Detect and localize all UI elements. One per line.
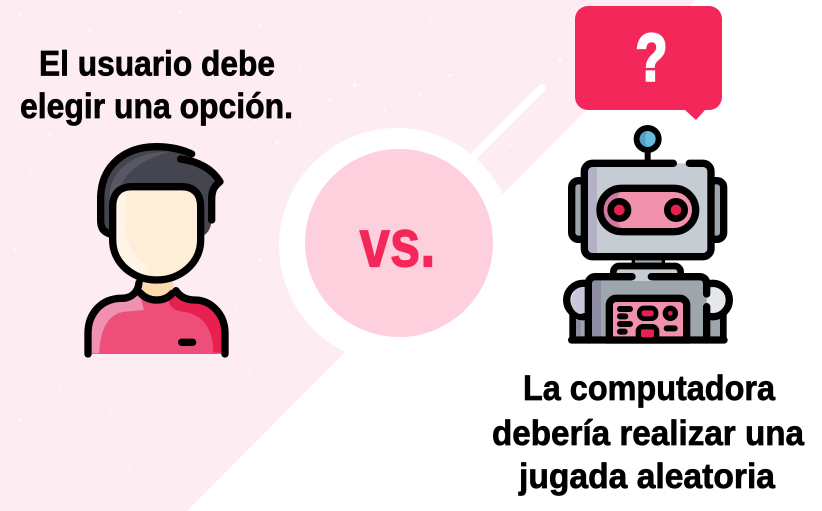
robot neck — [633, 257, 663, 267]
caption: computer: jugada aleatoria — [518, 457, 776, 496]
caption: computer: La computadora — [523, 369, 775, 408]
robot arms — [567, 283, 729, 340]
icon: robot — [567, 128, 729, 340]
heading: user: El usuario debe — [39, 44, 275, 84]
heading: user — [20, 44, 293, 126]
vs. badge — [279, 128, 515, 364]
robot body — [572, 272, 724, 340]
icon: user avatar — [88, 147, 225, 354]
robot collar — [613, 266, 681, 279]
robot chest panel — [609, 298, 687, 340]
vs. label: vs. — [360, 206, 436, 282]
robot ears — [572, 181, 724, 239]
robot head — [584, 163, 711, 257]
robot antenna — [637, 128, 659, 163]
decorative white diagonal bar — [468, 88, 542, 162]
caption: computer: debería realizar una — [492, 414, 804, 453]
speech bubble with question mark — [575, 6, 722, 120]
caption: computer — [492, 369, 804, 496]
question mark: ? — [636, 20, 668, 96]
heading: user: elegir una opción. — [20, 87, 293, 126]
